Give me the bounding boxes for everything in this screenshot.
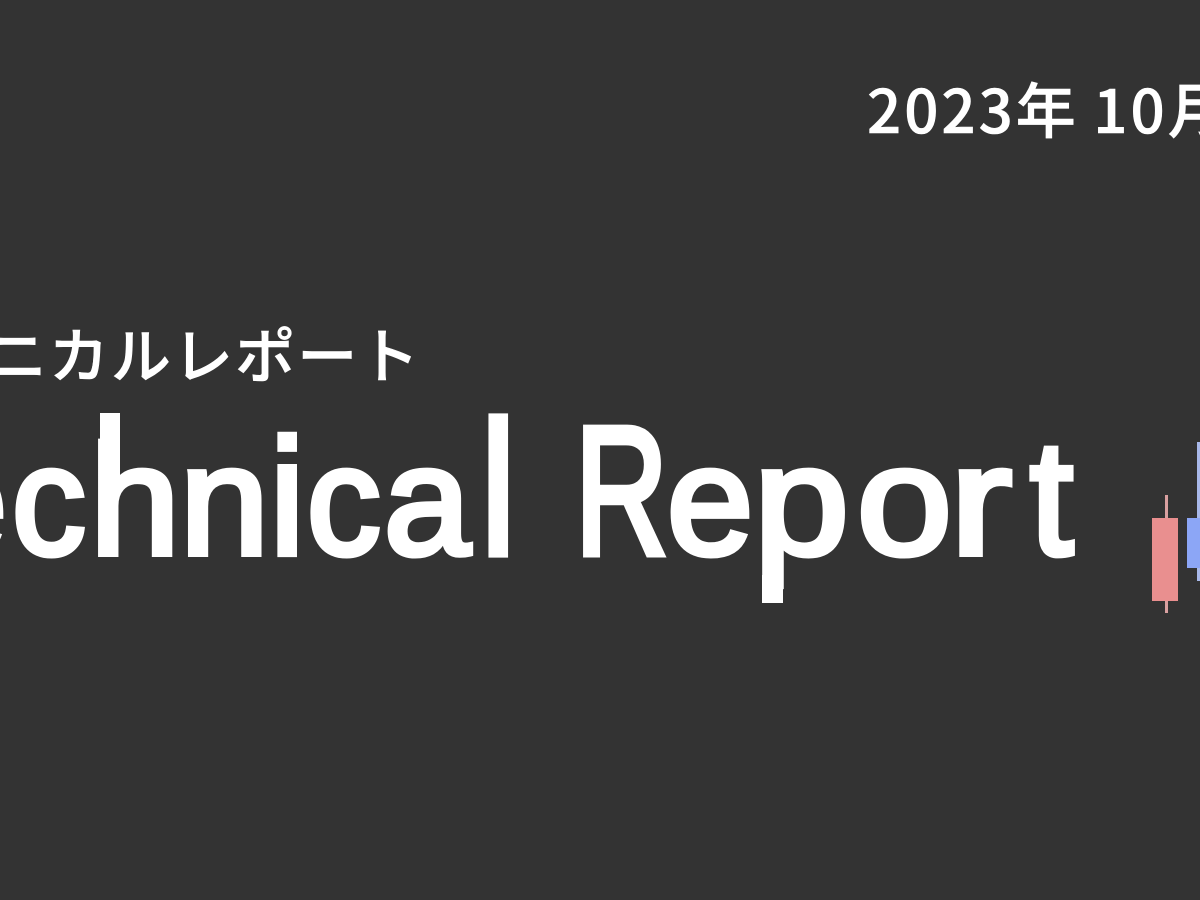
title: Technical Report: r: [950, 415, 1012, 587]
title: Technical Report: R: [575, 389, 668, 593]
title: Technical Report: c: [307, 415, 381, 588]
title: Technical Report: c: [12, 415, 86, 588]
title: Technical Report: a: [384, 414, 471, 587]
title: Technical Report: t: [1030, 407, 1073, 589]
title: Technical Report: h: [90, 414, 180, 587]
title: Technical Report: e: [667, 414, 753, 587]
icon: candlestick chart: [1152, 442, 1200, 613]
title: Technical Report: n: [180, 415, 269, 587]
title: Technical Report: i: [270, 405, 304, 589]
title: Technical Report: p: [754, 414, 849, 587]
title: Technical Report: l: [481, 382, 515, 594]
title: Technical Report: o: [857, 414, 952, 587]
title: Technical Report: [0, 382, 1073, 603]
red candle: [1152, 495, 1178, 613]
blue candle: [1187, 442, 1200, 581]
